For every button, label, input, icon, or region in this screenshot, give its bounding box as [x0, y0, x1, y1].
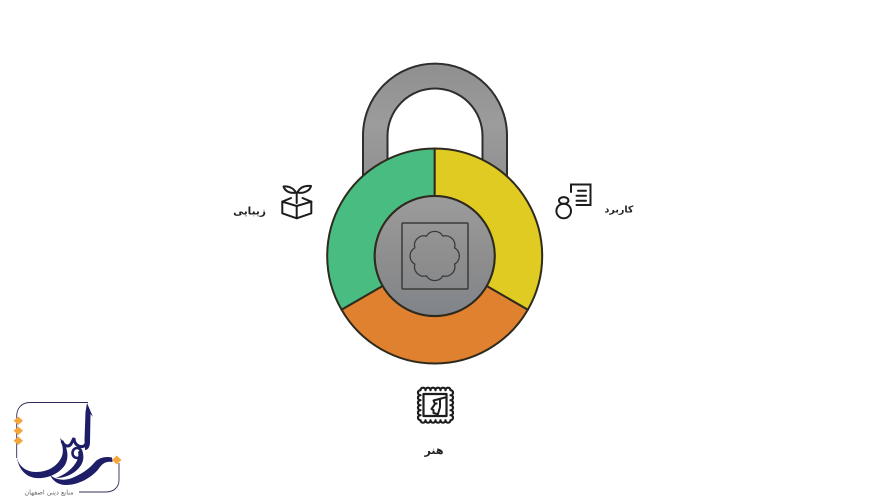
segment: orange	[342, 286, 528, 364]
logo tagline: منابع دینی اصفهان	[24, 488, 74, 496]
icon: document and ring	[556, 184, 590, 218]
label: art: هنر	[424, 444, 443, 457]
icon: gift box with sprout	[282, 186, 311, 218]
flower outline	[410, 231, 459, 281]
lock shackle	[363, 64, 507, 185]
label: function: کاربرد	[605, 204, 634, 216]
icon: postage stamp with profile	[418, 388, 453, 423]
logo frame	[17, 402, 119, 492]
segment: yellow	[435, 148, 542, 310]
logo	[14, 402, 122, 496]
logo orange diamonds	[14, 416, 122, 464]
keyhole square	[402, 223, 468, 289]
segment: green	[327, 148, 435, 310]
label: beauty: زیبایی	[233, 206, 266, 218]
logo calligraphy	[17, 403, 113, 485]
lock centre dial	[375, 196, 495, 316]
lock body ring	[327, 148, 542, 364]
